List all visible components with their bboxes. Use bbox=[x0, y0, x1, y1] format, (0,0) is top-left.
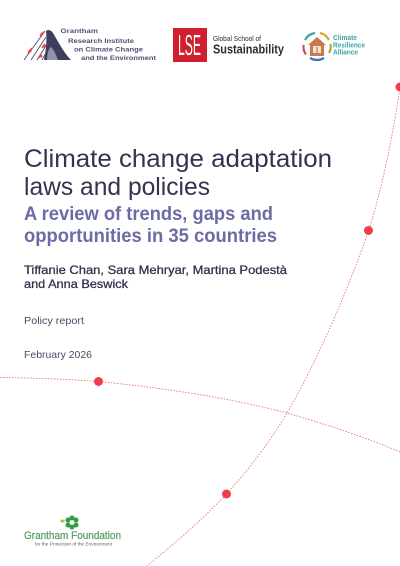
title bbox=[24, 145, 332, 201]
school name: Sustainability bbox=[213, 42, 284, 56]
authors: and Anna Beswick bbox=[24, 277, 129, 291]
marker dots bbox=[94, 82, 400, 498]
logo: Grantham Research Institute bbox=[24, 29, 156, 62]
subtitle bbox=[24, 204, 277, 247]
logo: Climate Resilience Alliance bbox=[303, 33, 365, 60]
subtitle: A review of trends, gaps and bbox=[24, 204, 273, 225]
authors bbox=[24, 263, 287, 291]
alliance name: Resilience bbox=[333, 42, 365, 50]
dotted arc: vertical bbox=[147, 87, 400, 566]
dotted arc: horizontal bbox=[0, 378, 400, 452]
icon: house in ring bbox=[303, 33, 331, 60]
date: February 2026 bbox=[24, 349, 92, 361]
school name: Global School of bbox=[213, 34, 261, 43]
logo: LSE Global School of Sustainability bbox=[173, 28, 284, 62]
logo text: Research Institute bbox=[68, 39, 135, 45]
logo text bbox=[60, 29, 156, 62]
logo: Grantham Foundation bbox=[24, 516, 121, 546]
icon: green flower bbox=[60, 516, 78, 530]
subtitle: opportunities in 35 countries bbox=[24, 226, 277, 247]
alliance name: Alliance bbox=[333, 50, 358, 56]
title: laws and policies bbox=[24, 173, 210, 201]
alliance name bbox=[333, 35, 365, 56]
foundation strapline: for the Protection of the Environment bbox=[35, 542, 113, 546]
title: Climate change adaptation bbox=[24, 145, 332, 173]
foundation name: Grantham Foundation bbox=[24, 530, 121, 542]
alliance name: Climate bbox=[333, 35, 357, 42]
logo text: Grantham bbox=[60, 29, 98, 35]
icon: Grantham mountain bbox=[24, 30, 71, 60]
logo text: on Climate Change bbox=[74, 48, 144, 54]
logo text: and the Environment bbox=[81, 56, 156, 62]
authors: Tiffanie Chan, Sara Mehryar, Martina Podestà bbox=[24, 263, 287, 277]
LSE red block: LSE bbox=[178, 30, 201, 62]
report type: Policy report bbox=[24, 315, 84, 327]
school name bbox=[213, 34, 284, 56]
